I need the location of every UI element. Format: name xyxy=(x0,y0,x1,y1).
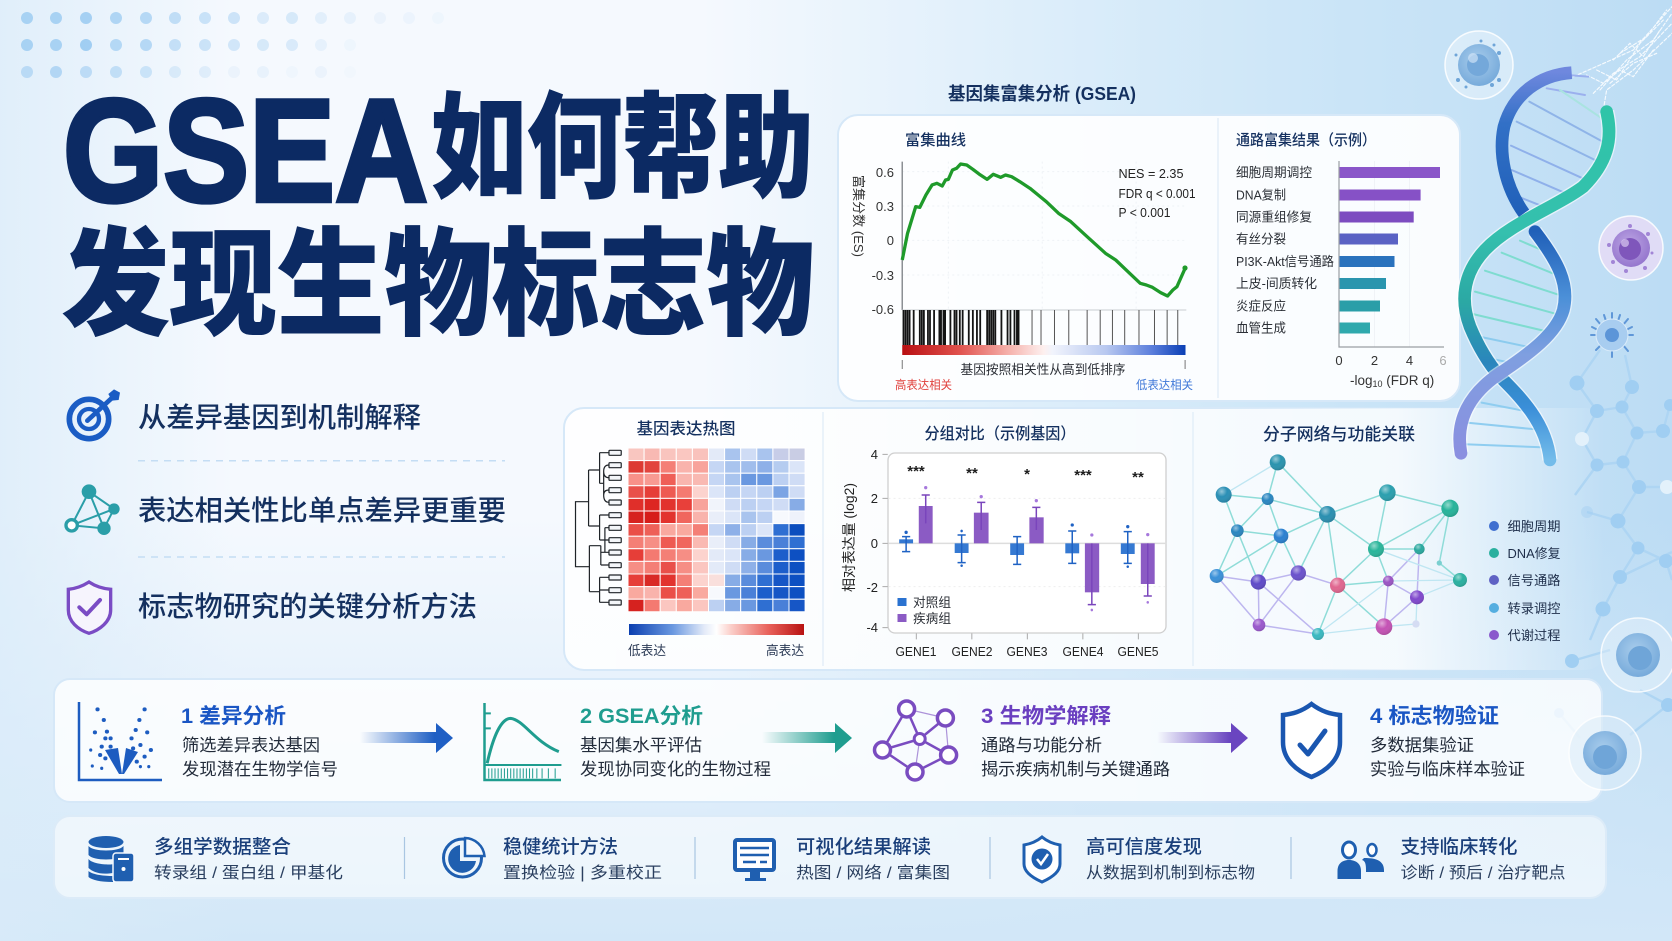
icon: people xyxy=(1338,842,1384,879)
legend: network xyxy=(1489,519,1560,643)
panel: workflow xyxy=(54,679,1602,802)
text: bullet 1: 从差异基因到机制解释 xyxy=(138,402,421,433)
icon: shield check xyxy=(1283,704,1340,777)
feature 5: 诊断 / 预后 / 治疗靶点 xyxy=(1400,864,1566,882)
feature 3 xyxy=(735,836,950,882)
bullet list xyxy=(66,389,506,633)
chart: group comparison: * xyxy=(1024,466,1030,483)
step 4: 实验与临床样本验证 xyxy=(1370,760,1525,779)
chart: enrichment curve: 基因按照相关性从高到低排序 xyxy=(960,362,1126,377)
chart: group comparison: 4 xyxy=(871,447,878,462)
icon: pie chart xyxy=(444,838,484,877)
icon: cell top xyxy=(1445,31,1513,99)
legend: network: DNA修复 xyxy=(1508,546,1560,561)
chart: enrichment curve: 0.6 xyxy=(876,165,894,180)
feature 3: 可视化结果解读 xyxy=(796,836,931,858)
chart: enrichment curve xyxy=(851,162,1196,392)
chart: enrichment curve: 0 xyxy=(887,233,894,248)
title: 如何帮助 xyxy=(431,86,814,213)
chart: molecular network xyxy=(1210,454,1467,640)
chart: heatmap: 高表达 xyxy=(766,643,804,658)
heading: heatmap: 基因表达热图 xyxy=(636,420,736,438)
illustration: DNA helix xyxy=(1460,7,1672,460)
chart: pathway bars: 上皮-间质转化 xyxy=(1236,276,1317,291)
legend: network: 细胞周期 xyxy=(1508,519,1560,534)
step 4 xyxy=(1283,704,1525,779)
icon: target xyxy=(69,389,120,439)
chart: group comparison: GENE2 xyxy=(952,644,992,659)
chart: group comparison: *** xyxy=(907,463,925,480)
arrow 2 xyxy=(762,723,852,753)
dendrogram xyxy=(576,450,621,605)
chart: pathway bars: 炎症反应 xyxy=(1236,298,1286,314)
feature 5 xyxy=(1338,836,1566,882)
panel: GSEA xyxy=(838,115,1460,401)
step 3: 3 生物学解释 xyxy=(981,704,1111,728)
chart: enrichment curve: 低表达相关 xyxy=(1136,378,1193,392)
chart: enrichment curve: 0.3 xyxy=(876,199,894,214)
chart: pathway bars xyxy=(1236,161,1447,389)
heading: enrichment curve: 富集曲线 xyxy=(905,131,966,149)
icon: lower cells xyxy=(1569,618,1672,790)
step 1: 1 差异分析 xyxy=(181,705,286,728)
decorative dot matrix xyxy=(21,12,444,78)
chart: pathway bars: 6 xyxy=(1439,353,1447,368)
chart: enrichment curve: -0.6 xyxy=(872,302,894,317)
arrow 3 xyxy=(1157,723,1248,753)
icon: verified shield xyxy=(1024,837,1060,882)
legend: network: 转录调控 xyxy=(1508,601,1560,616)
feature 4 xyxy=(1024,836,1255,882)
chart: enrichment curve: P < 0.001 xyxy=(1118,205,1170,220)
text: bullet 3: 标志物研究的关键分析方法 xyxy=(138,591,477,622)
feature 5: 支持临床转化 xyxy=(1400,836,1518,858)
chart: enrichment curve: 富集分数 (ES) xyxy=(851,175,866,257)
chart: heatmap: 低表达 xyxy=(628,643,666,658)
chart: pathway bars: 细胞周期调控 xyxy=(1236,165,1312,180)
chart: pathway bars: PI3K-Akt信号通路 xyxy=(1236,254,1334,269)
legend: network: 代谢过程 xyxy=(1508,628,1560,643)
arrow 1 xyxy=(360,723,453,753)
feature 2: 置换检验 | 多重校正 xyxy=(503,864,662,882)
title: 发现生物标志物 xyxy=(62,220,814,350)
molecular hexagon network decoration xyxy=(1554,350,1672,738)
chart: group comparison: 相对表达量 (log2) xyxy=(841,483,857,592)
step 4: 4 标志物验证 xyxy=(1370,704,1499,728)
chart: pathway bars: DNA复制 xyxy=(1236,188,1286,202)
chart: heatmap xyxy=(576,448,805,658)
step 2 xyxy=(484,703,771,780)
heading: pathways: 通路富集结果（示例） xyxy=(1236,131,1376,149)
title: GSEA xyxy=(63,69,428,232)
heading: molecular network: 分子网络与功能关联 xyxy=(1263,424,1415,444)
chart: group comparison: GENE4 xyxy=(1062,644,1104,659)
panel: expression analysis xyxy=(564,408,1605,670)
chart: group comparison: 0 xyxy=(871,536,878,551)
chart: group comparison: -2 xyxy=(866,580,878,595)
step 3 xyxy=(874,701,1170,780)
chart: pathway bars: (FDR q) xyxy=(1383,373,1434,388)
icon: purple shield xyxy=(68,582,111,633)
chart: group comparison: ** xyxy=(1132,469,1144,486)
chart: pathway bars: 血管生成 xyxy=(1236,320,1286,336)
chart: group comparison: 对照组 xyxy=(913,595,951,610)
chart: group comparison: GENE5 xyxy=(1118,644,1158,659)
chart: group comparison: ** xyxy=(966,465,978,482)
chart: group comparison: 2 xyxy=(871,491,878,506)
chart: pathway bars: 0 xyxy=(1335,353,1343,368)
feature 4: 从数据到机制到标志物 xyxy=(1086,864,1255,882)
step 3: 通路与功能分析 xyxy=(981,736,1102,755)
chart: pathway bars: 10 xyxy=(1373,379,1383,389)
feature 3: 热图 / 网络 / 富集图 xyxy=(796,863,950,882)
icon: network xyxy=(874,701,957,780)
frayed strand dissolve xyxy=(1573,7,1672,110)
title xyxy=(62,69,814,350)
chart: enrichment curve: NES = 2.35 xyxy=(1118,166,1184,181)
icon: enrichment plot xyxy=(484,703,561,780)
heading: group comparison: 分组对比（示例基因） xyxy=(924,425,1076,443)
icon: virus xyxy=(1591,313,1633,357)
feature 2 xyxy=(444,835,662,882)
text: bullet 2: 表达相关性比单点差异更重要 xyxy=(138,495,506,526)
icon: volcano plot xyxy=(79,702,162,780)
heatmap color bar xyxy=(629,624,804,635)
feature 1 xyxy=(88,836,343,882)
chart: group comparison: 疾病组 xyxy=(913,611,951,626)
chart: group comparison xyxy=(841,447,1166,659)
icon: purple cell xyxy=(1599,216,1663,280)
chart: enrichment curve: -0.3 xyxy=(872,268,894,283)
step 4: 多数据集验证 xyxy=(1370,736,1474,755)
feature 2: 稳健统计方法 xyxy=(503,835,618,858)
feature 4: 高可信度发现 xyxy=(1086,836,1202,858)
chart: group comparison: -4 xyxy=(866,620,878,635)
step 2: 基因集水平评估 xyxy=(580,736,702,755)
chart: pathway bars: 2 xyxy=(1371,353,1378,368)
chart: group comparison: *** xyxy=(1074,467,1092,484)
icon: network triangle xyxy=(66,484,120,535)
chart: pathway bars: 有丝分裂 xyxy=(1236,232,1286,246)
feature 1: 多组学数据整合 xyxy=(154,836,291,858)
step 2: 2 GSEA分析 xyxy=(580,705,703,728)
step 3: 揭示疾病机制与关键通路 xyxy=(981,760,1170,779)
chart: enrichment curve: 高表达相关 xyxy=(895,377,952,392)
step 1 xyxy=(79,702,338,780)
icon: monitor xyxy=(735,840,774,881)
chart: pathway bars: -log xyxy=(1350,373,1373,388)
chart: enrichment curve: FDR q < 0.001 xyxy=(1118,186,1196,201)
step 1: 发现潜在生物学信号 xyxy=(182,760,338,779)
panel heading: GSEA: 基因集富集分析 (GSEA) xyxy=(948,83,1136,104)
panel: features xyxy=(54,816,1606,898)
chart: group comparison: GENE3 xyxy=(1006,644,1048,659)
step 2: 发现协同变化的生物过程 xyxy=(580,760,771,779)
feature 1: 转录组 / 蛋白组 / 甲基化 xyxy=(154,864,343,882)
icon: database xyxy=(88,836,134,882)
step 1: 筛选差异表达基因 xyxy=(182,736,320,755)
chart: pathway bars: 同源重组修复 xyxy=(1236,210,1312,224)
chart: group comparison: GENE1 xyxy=(896,644,936,659)
legend: network: 信号通路 xyxy=(1508,573,1560,588)
chart: pathway bars: 4 xyxy=(1406,353,1413,368)
